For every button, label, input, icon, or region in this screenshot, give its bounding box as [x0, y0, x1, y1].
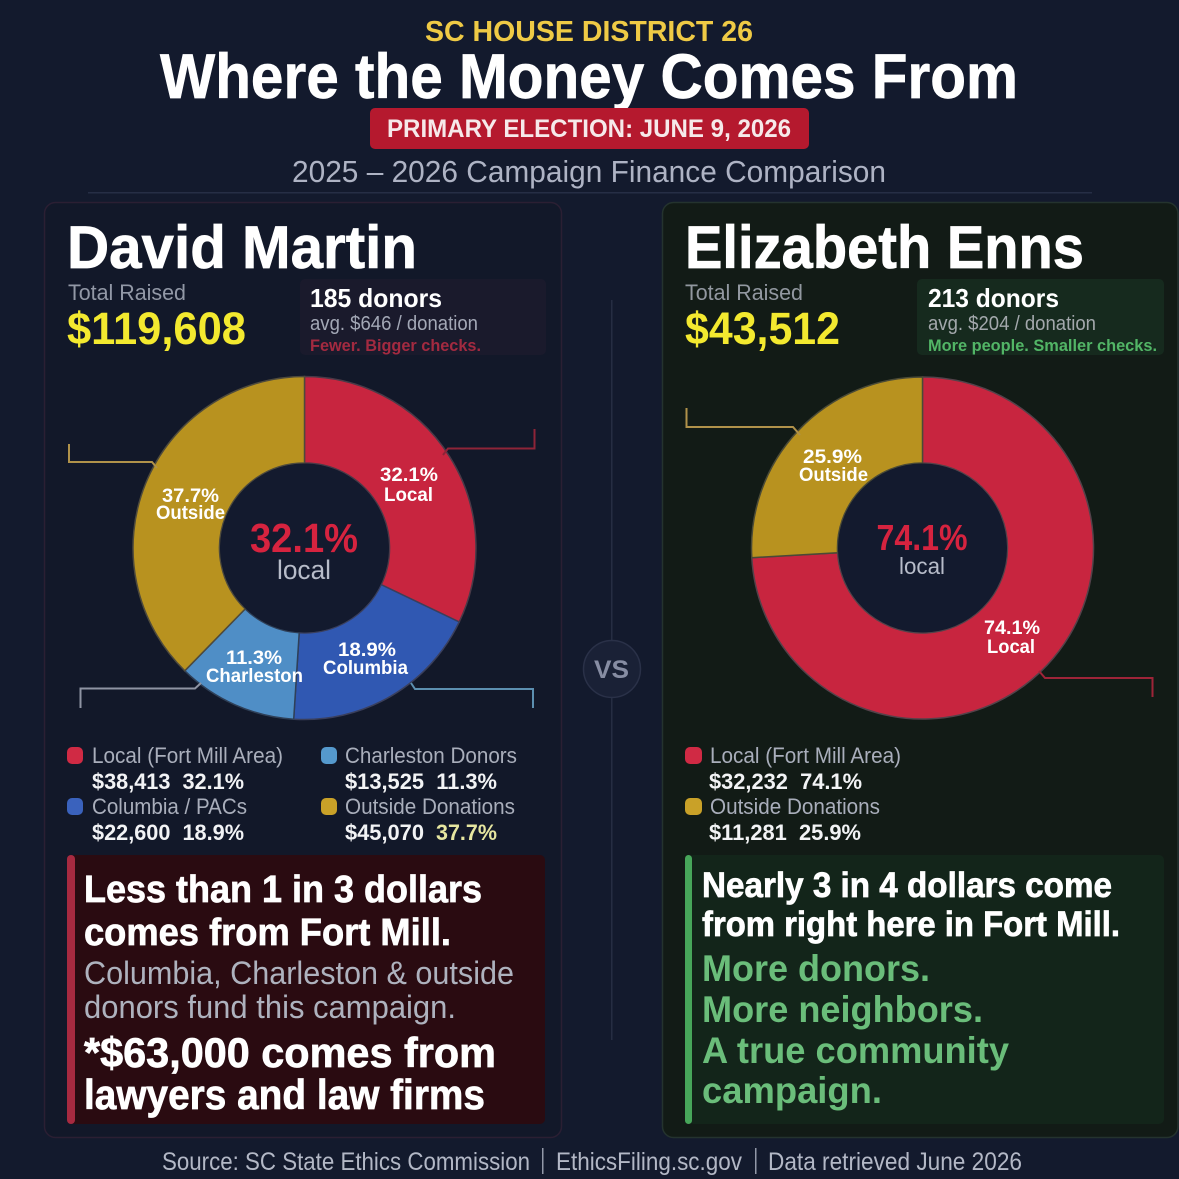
badge: primary election date: PRIMARY ELECTION: JUNE 9, 2026: [387, 115, 791, 143]
legend item: local: $38,413 32.1%: [92, 769, 244, 794]
donut chart: [133, 376, 476, 720]
eyebrow: district: SC HOUSE DISTRICT 26: [425, 16, 753, 48]
label: local: [984, 618, 1040, 658]
callout: Elizabeth Enns takeaway: Nearly 3 in 4 dollars come: [702, 866, 1112, 905]
label: local: Local: [384, 485, 433, 506]
legend item: local: [685, 743, 901, 794]
leader line: local: [1039, 671, 1152, 697]
donor stats box: 185 donors: [310, 283, 442, 313]
center value: [250, 515, 358, 585]
candidate name: David Martin: [67, 214, 417, 281]
donut hole: [838, 464, 1007, 632]
donor stats box: 213 donors: [928, 283, 1059, 313]
legend: [67, 743, 517, 845]
segment: outside: [133, 376, 304, 671]
legend item: outside: [685, 794, 880, 845]
center value: local: [899, 553, 945, 579]
donor stats box: [300, 279, 546, 355]
total raised: $119,608: [67, 303, 246, 354]
legend item: outside: [321, 794, 515, 845]
label: local: 74.1%: [984, 618, 1040, 639]
VS divider: [584, 300, 640, 1040]
callout: Elizabeth Enns takeaway: from right here in Fort Mill.: [702, 905, 1120, 944]
legend item: Charleston: [321, 743, 517, 794]
legend item: Columbia: $22,600 18.9%: [92, 820, 244, 845]
subtitle: 2025 – 2026 Campaign Finance Comparison: [292, 154, 886, 189]
leader line: Columbia: [411, 683, 533, 708]
VS divider: VS: [594, 656, 629, 684]
legend item: outside: $11,281 25.9%: [709, 820, 861, 845]
label: outside: Outside: [156, 503, 225, 524]
legend item: outside: Outside Donations: [710, 794, 880, 819]
label: outside: [799, 447, 868, 486]
leader line: outside: [69, 444, 157, 468]
badge: primary election date: [370, 108, 809, 149]
panel: Elizabeth Enns: [662, 202, 1178, 1138]
label: local: [380, 465, 438, 506]
segment: Charleston: [185, 609, 299, 719]
legend: [685, 743, 901, 845]
label: outside: Outside: [799, 465, 868, 486]
leader line: Charleston: [80, 683, 201, 708]
total raised: Total Raised: [685, 280, 803, 305]
panel: David Martin: [44, 202, 562, 1138]
donut hole: [220, 464, 389, 632]
legend item: outside: Outside Donations: [345, 794, 515, 819]
callout: David Martin takeaway: lawyers and law firms: [84, 1071, 485, 1118]
center value: local: [277, 555, 331, 585]
label: Columbia: Columbia: [323, 658, 408, 679]
total raised: [67, 280, 246, 354]
legend item: outside: $45,070: [345, 820, 424, 845]
candidate name: Elizabeth Enns: [685, 214, 1084, 281]
total raised: [685, 280, 840, 354]
legend item: Charleston: Charleston Donors: [345, 743, 517, 768]
donut chart: [752, 377, 1094, 719]
donor stats box: More people. Smaller checks.: [928, 336, 1157, 355]
segment: outside: [752, 377, 922, 558]
footer source line: [162, 1148, 1022, 1176]
callout: David Martin takeaway: [67, 855, 545, 1124]
label: Charleston: Charleston: [206, 666, 303, 687]
label: local: 32.1%: [380, 465, 438, 486]
footer source line: EthicsFiling.sc.gov: [556, 1148, 742, 1176]
callout: David Martin takeaway: Less than 1 in 3 dollars: [84, 869, 482, 911]
callout: Elizabeth Enns takeaway: More neighbors.: [702, 989, 983, 1030]
center value: 74.1%: [876, 517, 968, 558]
legend item: Columbia: Columbia / PACs: [92, 794, 247, 819]
label: Columbia: [323, 640, 408, 679]
title: Where the Money Comes From: [160, 42, 1018, 112]
callout: David Martin takeaway: Columbia, Charleston & outside: [84, 955, 514, 991]
total raised: Total Raised: [68, 280, 186, 305]
legend item: local: Local (Fort Mill Area): [710, 743, 901, 768]
label: outside: 37.7%: [162, 486, 219, 507]
total raised: $43,512: [685, 303, 840, 354]
legend item: local: [67, 743, 283, 794]
segment: local: [752, 377, 1094, 719]
footer source line: Source: SC State Ethics Commission: [162, 1148, 530, 1176]
legend item: Columbia: [67, 794, 247, 845]
label: Charleston: [206, 648, 303, 687]
callout: David Martin takeaway: *$63,000 comes from: [84, 1029, 496, 1076]
center value: [876, 517, 968, 579]
leader line: outside: [686, 408, 800, 435]
callout: David Martin takeaway: comes from Fort Mill.: [84, 912, 451, 954]
leader line: local: [443, 429, 534, 455]
footer source line: Data retrieved June 2026: [768, 1148, 1022, 1176]
donor stats box: [917, 279, 1164, 355]
center value: 32.1%: [250, 515, 358, 561]
label: outside: [156, 486, 225, 524]
donor stats box: avg. $646 / donation: [310, 313, 478, 335]
callout: Elizabeth Enns takeaway: [685, 855, 1164, 1124]
callout: Elizabeth Enns takeaway: campaign.: [702, 1070, 882, 1111]
legend item: local: Local (Fort Mill Area): [92, 743, 283, 768]
label: Columbia: 18.9%: [338, 640, 396, 661]
donor stats box: Fewer. Bigger checks.: [310, 336, 481, 355]
callout: David Martin takeaway: donors fund this campaign.: [84, 989, 456, 1025]
callout: Elizabeth Enns takeaway: More donors.: [702, 948, 930, 989]
legend item: Charleston: $13,525 11.3%: [345, 769, 497, 794]
header: [160, 16, 1018, 189]
callout: Elizabeth Enns takeaway: A true community: [702, 1030, 1009, 1071]
segment: local: [304, 376, 476, 622]
label: outside: 25.9%: [803, 447, 862, 468]
donor stats box: avg. $204 / donation: [928, 313, 1096, 335]
segment: Columbia: [294, 585, 459, 720]
label: local: Local: [987, 637, 1035, 658]
label: Charleston: 11.3%: [226, 648, 282, 669]
legend item: outside: 37.7%: [436, 820, 497, 845]
legend item: local: $32,232 74.1%: [709, 769, 862, 794]
